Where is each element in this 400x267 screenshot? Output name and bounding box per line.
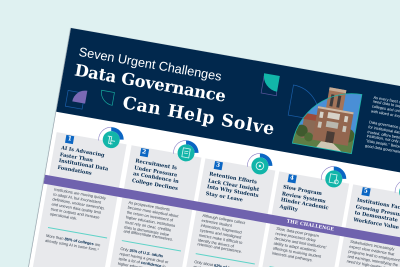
card title 4 — [279, 184, 329, 213]
body text 4: decisions and limit institutions' — [274, 235, 327, 249]
card 3 — [166, 158, 275, 267]
body text 1: and uneven data quality limit — [51, 201, 101, 215]
intro paragraph one — [371, 94, 400, 123]
card title 1: Institutional Data — [58, 158, 109, 173]
header decorative shapes — [65, 73, 317, 118]
number badge 3: 3 — [215, 161, 221, 169]
body text 1: to adopt AI, but inconsistent — [53, 191, 102, 205]
body text 4: offerings to evolving student — [273, 245, 322, 258]
body text 5: and earnings, intensifying the — [347, 253, 399, 267]
card title 4: Review Systems — [281, 191, 326, 204]
main title line one: Data Governance — [73, 60, 227, 105]
card title 1: Faster Than — [59, 152, 93, 163]
card 5 — [314, 184, 400, 267]
main title line two: Can Help Solve — [121, 93, 276, 140]
body text 3: Although colleges collect — [202, 213, 246, 225]
statistic 2 — [117, 246, 169, 267]
card title 5: Workforce Value — [353, 217, 399, 230]
body text 1: definitions, unclear ownership, — [52, 196, 105, 210]
card title 1: AI Is Advancing — [60, 145, 105, 159]
card title 1: Foundations — [57, 164, 92, 176]
card 2 — [92, 145, 201, 267]
body text 4: review processes delay — [275, 231, 316, 243]
body text 1: Institutions are moving quickly — [54, 187, 106, 201]
body text 4: interests and pathways. — [272, 250, 313, 262]
body text 1: operational risk. — [50, 211, 78, 220]
body text 4 — [272, 226, 327, 262]
challenge band: THE CHALLENGE — [286, 219, 334, 233]
number badge 4: 4 — [289, 174, 294, 182]
body text 1: trust in outputs and increase — [50, 206, 100, 219]
card title 4: Hinder Academic — [280, 197, 329, 211]
body text 2: and differentiate themselves. — [123, 229, 173, 242]
body text 2: higher education, institutions — [126, 214, 176, 228]
body text 2: data to demonstrate value — [124, 224, 170, 237]
body text 2: become more skeptical about — [127, 205, 179, 218]
number badge 1 — [65, 135, 74, 144]
card title 1 — [57, 145, 109, 176]
number badge 2 — [139, 148, 149, 157]
icon: retention cycle — [247, 153, 272, 174]
card title 2: Under Pressure — [134, 165, 178, 178]
card title 5: to Demonstrate — [354, 210, 398, 224]
card title 3 — [205, 171, 260, 203]
body text 3: identify the drivers of — [198, 237, 234, 248]
number badge 2: 2 — [141, 148, 147, 156]
body text 2: the return on investment of — [126, 209, 173, 222]
statistic 1: already using AI in some form.¹ — [45, 238, 99, 252]
body text 5: expect clear evidence that — [349, 244, 395, 256]
body text 4: ability to adapt academic — [273, 240, 317, 253]
body text 3: extensive student — [201, 218, 232, 228]
card title 3: Retention Efforts — [209, 171, 257, 186]
card title 5 — [353, 197, 400, 230]
statistic 2: report having a great deal or — [119, 251, 169, 264]
body text 3 — [197, 213, 246, 254]
icon: workforce — [394, 182, 400, 196]
eyebrow heading: Seven Urgent Challenges — [78, 45, 223, 84]
number badge 5: 5 — [363, 187, 368, 195]
header panel — [56, 28, 400, 172]
body text 3: retention and persistence. — [197, 242, 242, 254]
body text 5 — [346, 239, 400, 267]
body text 3: information, fragmented — [200, 222, 242, 235]
intro paragraph two — [365, 119, 400, 159]
card title 3: Stay or Leave — [205, 190, 243, 203]
body text 2: must rely on clear, credible — [125, 219, 172, 232]
card title 3: Lack Clear Insight — [208, 178, 260, 193]
body text 3: systems and misaligned — [200, 227, 242, 239]
number badge 5 — [361, 187, 370, 196]
campus photo — [292, 87, 362, 154]
card 1 — [18, 132, 127, 267]
icon: data network — [98, 126, 124, 148]
body text 5: Stakeholders increasingly — [350, 239, 395, 251]
number badge 4 — [287, 174, 296, 183]
body text 2: As prospective students — [128, 200, 170, 212]
body text 1 — [50, 187, 106, 220]
number badge 1: 1 — [67, 135, 72, 143]
card 4 — [240, 171, 349, 267]
card title 4: Slow Program — [283, 184, 322, 197]
number badge 3 — [213, 161, 222, 170]
card title 4: Agility — [279, 203, 298, 213]
body text 5: programs lead to employment — [348, 248, 400, 262]
statistic 2: Only 36% of U.S. adults — [120, 246, 164, 258]
card title 2: as Confidence in — [133, 171, 179, 185]
icon: document chart — [173, 140, 199, 162]
card title 2: College Declines — [131, 177, 178, 191]
body text 3: metrics make it difficult to — [199, 232, 243, 245]
card title 3: Into Why Students — [206, 184, 259, 199]
statistic 1: More than 85% of colleges are — [46, 233, 101, 247]
body text 2 — [123, 200, 179, 242]
card title 2: Recruitment Is — [135, 158, 177, 171]
body text 4: Slow, data-poor program — [276, 226, 319, 238]
challenge band — [44, 175, 400, 267]
card title 2 — [131, 158, 179, 191]
icon: review document — [321, 166, 346, 188]
